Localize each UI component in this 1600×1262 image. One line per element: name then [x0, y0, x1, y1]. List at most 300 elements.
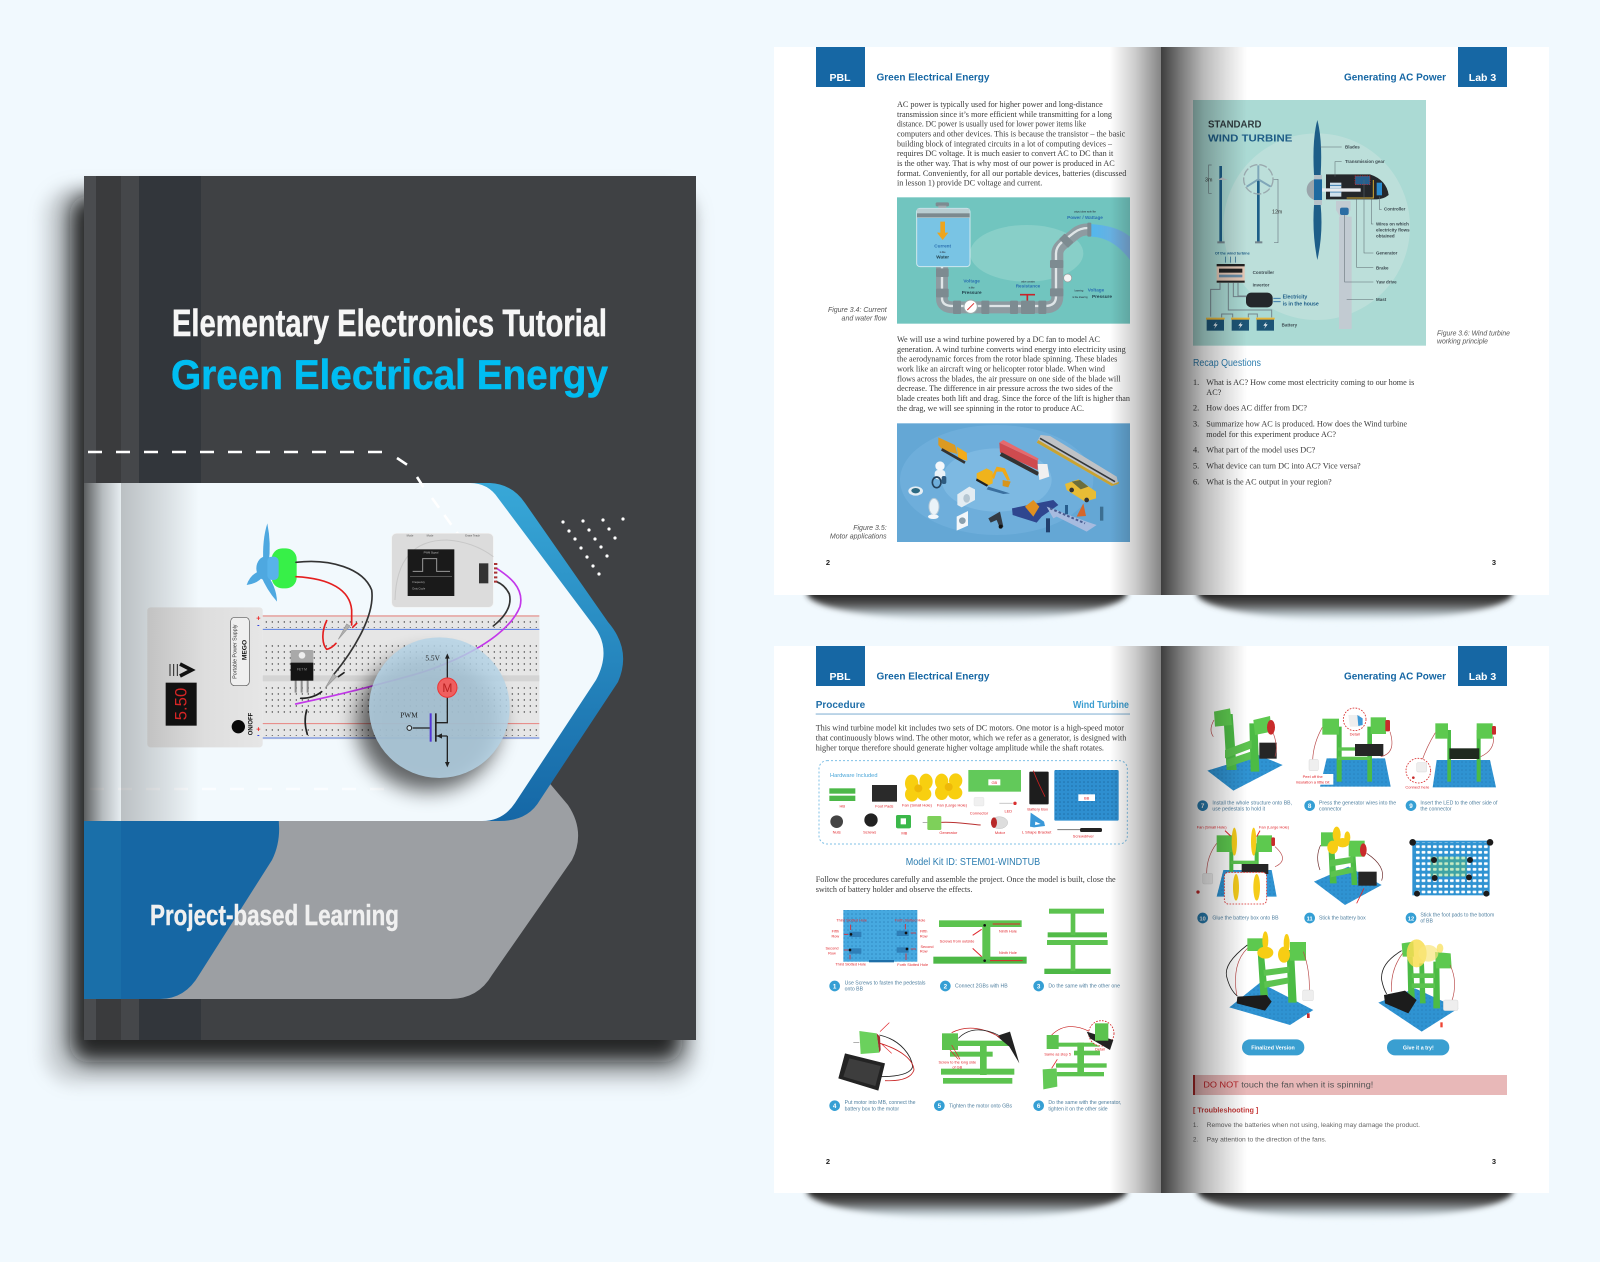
- figure 3.5: motor applications: [897, 423, 1130, 542]
- step 8: Press the generator wires into the: [1319, 800, 1396, 806]
- step 12: 12: [1408, 916, 1414, 922]
- troubleshooting list: Remove the batteries when not using, leaking may damage the product.: [1207, 1123, 1420, 1129]
- step 1: Second: [921, 945, 933, 949]
- oscilloscope: Mode: [407, 534, 414, 538]
- step 7: Install the whole structure onto BB,: [1212, 800, 1292, 806]
- disc device: [908, 486, 923, 496]
- figure 3.4: current and water flow: Power / Wattage: [1067, 215, 1103, 220]
- PBL tab: PBL: [830, 671, 851, 683]
- transistor: [291, 650, 313, 693]
- spine bands on the dark areas: [84, 176, 201, 1040]
- page number left: 2: [826, 1157, 830, 1166]
- power supply: +: [256, 614, 260, 623]
- recap questions list: 2.: [1193, 404, 1199, 413]
- power supply: Portable Power Supply: [233, 624, 239, 679]
- step 2: Ninth Hole: [999, 930, 1017, 934]
- left gutter shading: [1110, 646, 1161, 1193]
- small turbines: 12m: [1272, 209, 1283, 215]
- white dot pattern: [561, 517, 625, 576]
- step 5: of GB: [952, 1065, 963, 1069]
- BB board: [1054, 770, 1119, 821]
- step 6: tighten it on the other side: [1048, 1106, 1108, 1112]
- step 8: connector: [1319, 806, 1342, 812]
- magnifier circuit lens: M: [442, 681, 452, 695]
- body text: AC power: is the other way. That is why most of our power is produced in AC: [897, 159, 1115, 168]
- figure 3.4: current and water flow: lowering: [1075, 289, 1084, 292]
- recap questions list: [1193, 378, 1414, 487]
- step 10: 10: [1200, 916, 1206, 922]
- screwdriver: Screwdriver: [1073, 833, 1095, 838]
- step 9: 9: [1409, 803, 1413, 810]
- BB board: BB: [1084, 795, 1090, 800]
- page number left: 2: [826, 558, 830, 567]
- step 1: Forth Slotted Hole: [895, 918, 925, 922]
- figure 3.4: current and water flow: Resistance: [1016, 284, 1041, 289]
- step 1: onto BB: [845, 987, 864, 993]
- desk fan: [928, 498, 939, 519]
- step 5: Tighten the motor onto GBs: [949, 1103, 1013, 1109]
- motor: [991, 817, 1008, 835]
- body text: AC power: AC power is typically used for higher power and long-distance: [897, 100, 1103, 109]
- right gutter shading: [1161, 47, 1247, 595]
- wires: [296, 561, 521, 734]
- battery box: [1027, 771, 1049, 811]
- yaw drive: [1336, 201, 1351, 217]
- step 10: [1196, 825, 1290, 923]
- power supply: MEGO: [242, 640, 249, 660]
- figure 3.4: current and water flow: Pressure: [1092, 294, 1112, 299]
- foot pads: [872, 785, 897, 808]
- screwdriver: [1057, 828, 1102, 838]
- figure 3.4: current and water flow: Water: [936, 254, 949, 259]
- screws: [863, 813, 878, 835]
- right running head: Generating AC Power: [1344, 72, 1446, 84]
- figure 3.6: wind turbine: Yaw drive: [1376, 280, 1397, 285]
- bottom spread shadows: [807, 1164, 1513, 1218]
- figure 3.6: wind turbine: Controller: [1384, 207, 1406, 212]
- Lab 3 tab: Lab 3: [1469, 671, 1496, 683]
- body text: wind turbine: [897, 335, 1130, 413]
- body text: AC power: computers and other devices. This is because the transistor – the basic: [897, 130, 1126, 138]
- step 7: [1197, 708, 1292, 812]
- power supply: ON/OFF: [249, 712, 255, 735]
- step 1: Fifth: [832, 929, 839, 933]
- model kit ID: Model Kit ID: STEM01-WINDTUB: [906, 856, 1040, 868]
- step 6: Same as step 5: [1044, 1052, 1071, 1056]
- finalized version button: [1242, 1039, 1304, 1055]
- body text: wind turbine: blade creates both lift and drag. Since the force of the lift is higher than: [897, 394, 1130, 403]
- body text: wind turbine: flows across the blades, the air pressure on one side of the blade will: [897, 374, 1121, 383]
- follow paragraph: Follow the procedures carefully and assemble the project. Once the model is built, close the: [816, 875, 1116, 884]
- step 12: of BB: [1420, 919, 1434, 925]
- figure 3.6: wind turbine: Wires on which: [1376, 221, 1409, 226]
- finalized version button: Finalized Version: [1251, 1045, 1295, 1051]
- cover subtitle: Green Electrical Energy: [171, 351, 609, 398]
- dashed line: [88, 452, 458, 789]
- left page: [774, 47, 1161, 595]
- intro paragraph: This wind turbine model kit includes two sets of DC motors. One motor is a high-speed motor: [816, 724, 1124, 733]
- power supply: [147, 607, 263, 747]
- power supply: 5.50: [172, 688, 191, 720]
- figure 3.4: current and water flow: [897, 197, 1130, 324]
- controller, inverter and batteries: Invertor: [1253, 282, 1270, 287]
- troubleshooting list: 2.: [1193, 1138, 1198, 1144]
- step 4: Put motor into MB, connect the: [845, 1100, 916, 1106]
- GB board: [968, 770, 1021, 792]
- battery box: Battery Box: [1027, 806, 1048, 811]
- spine shading on the white panel: [84, 483, 199, 821]
- body text: wind turbine: the drag, we will see spinning in the rotor to produce AC.: [897, 404, 1084, 413]
- breadboard: [263, 615, 539, 739]
- step 9: Connect here: [1405, 785, 1430, 790]
- L bracket: L Shape Bracket: [1022, 829, 1052, 834]
- body text: AC power: transmission since it’s more efficient while transmitting for a long: [897, 110, 1112, 119]
- recap questions list: How does AC differ from DC?: [1206, 404, 1307, 413]
- caption: figure 3.5: Motor applications: [830, 533, 887, 540]
- caption: figure 3.6: [1437, 330, 1510, 346]
- body text: AC power: distance. DC power is usually used for lower power items like: [897, 120, 1086, 129]
- step 3: [1033, 909, 1120, 991]
- page number right: 3: [1492, 1157, 1496, 1166]
- GB board: GB: [991, 780, 998, 785]
- magnifier circuit lens: 5.5V: [425, 653, 441, 662]
- figure 3.4: current and water flow: valve creates: [1021, 280, 1036, 283]
- MB: MB: [901, 830, 908, 835]
- foot pads: Foot Pads: [875, 803, 893, 808]
- motor: Motor: [995, 830, 1006, 835]
- cover title: Elementary Electronics Tutorial: [172, 303, 607, 345]
- blades: [1313, 120, 1321, 260]
- PBL tab: PBL: [830, 72, 851, 84]
- figure 3.6: wind turbine: Generator: [1376, 251, 1398, 256]
- step 1: Row: [831, 934, 839, 938]
- figure 3.6: wind turbine: Blades: [1345, 145, 1360, 150]
- oscilloscope: Duty Cycle: [412, 586, 426, 590]
- step 12: Stick the foot pads to the bottom: [1420, 913, 1494, 919]
- LED: [999, 802, 1017, 813]
- connector: Connector: [970, 810, 989, 815]
- body text: wind turbine: the aerodynamic forces from the rotor blade spinning. These blades: [897, 355, 1117, 364]
- body text: AC power: in lesson 1) provide DC voltage and current.: [897, 179, 1042, 188]
- intro paragraph: [816, 724, 1126, 752]
- step 6: Detail: [1095, 1047, 1105, 1051]
- top spread shadows: [807, 566, 1513, 620]
- step 2: Screws from outside: [940, 939, 974, 943]
- leader lines: [1320, 147, 1382, 299]
- wall vent: [957, 511, 968, 531]
- cover label: Project-based Learning: [150, 900, 399, 932]
- recap questions list: What part of the model uses DC?: [1206, 446, 1316, 455]
- troubleshooting heading: [ Troubleshooting ]: [1193, 1108, 1258, 1115]
- magnifier circuit lens: [369, 637, 510, 778]
- step 8: insulation a little bit: [1296, 780, 1330, 785]
- caption: figure 3.5: Figure 3.5:: [853, 525, 887, 532]
- step 5: 5: [938, 1103, 942, 1110]
- recap questions list: model for this experiment produce AC?: [1206, 430, 1336, 439]
- procedure heading: Procedure: [816, 699, 865, 711]
- figure 3.6: wind turbine: [1193, 100, 1426, 346]
- LED: LED: [1004, 808, 1012, 813]
- step 2: 2: [944, 983, 948, 990]
- give it a try button: [1387, 1039, 1449, 1055]
- controller, inverter and batteries: Controller: [1253, 270, 1274, 275]
- body text: AC power: building block of integrated circuits in a lot of computing devices –: [897, 139, 1113, 148]
- assembly steps 7-12: [1196, 708, 1498, 925]
- step 1: Row: [828, 951, 836, 955]
- recap questions list: 4.: [1193, 446, 1199, 455]
- step 7: use pedestals to hold it: [1212, 806, 1266, 812]
- try it model: [1378, 939, 1458, 1032]
- step 8: 8: [1308, 803, 1312, 810]
- figure 3.4: current and water flow: is like lowering: [1072, 296, 1088, 299]
- top spread: [774, 47, 1549, 595]
- intro paragraph: that continuously blows wind. The other motor, which we refer as a generator, is designed with: [816, 734, 1126, 743]
- step 7: 7: [1201, 803, 1205, 810]
- nuts: [830, 815, 843, 835]
- step 5: Screw to the long side: [938, 1061, 976, 1065]
- recap questions list: Summarize how AC is produced. How does the Wind turbine: [1206, 420, 1407, 429]
- figure 3.4: current and water flow: Pressure: [962, 290, 982, 295]
- factory line: [1012, 500, 1103, 532]
- step 1: [826, 910, 933, 993]
- give it a try button: Give it a try!: [1403, 1045, 1434, 1051]
- oscilloscope: [392, 533, 497, 607]
- warning banner: DO NOT touch the fan when it is spinning!: [1203, 1080, 1373, 1090]
- procedure heading: [816, 699, 1130, 715]
- oscilloscope: Erase Teach: [465, 534, 481, 538]
- connector: [970, 797, 989, 815]
- step 4: 4: [833, 1103, 837, 1110]
- finalized models and notes: [1193, 931, 1507, 1144]
- book cover: [84, 176, 696, 1040]
- gray bottom shape: [84, 760, 578, 999]
- step 11: 11: [1307, 916, 1313, 922]
- book cover drop shadow: [44, 186, 698, 1084]
- recap questions list: 6.: [1193, 478, 1199, 487]
- fan small: Fan (Small Hole): [902, 803, 933, 808]
- left gutter shading: [1110, 47, 1161, 595]
- follow paragraph: [816, 875, 1116, 894]
- air conditioner: [957, 487, 975, 507]
- figure 3.6: wind turbine: electricity flows: [1376, 227, 1410, 232]
- left running head: Green Electrical Energy: [876, 672, 990, 682]
- follow paragraph: switch of battery holder and observe the effects.: [816, 885, 972, 894]
- hardware kit: Hardware Included: [830, 773, 877, 779]
- Lab 3 tab: Lab 3: [1469, 72, 1496, 84]
- troubleshooting list: [1193, 1123, 1420, 1144]
- figure 3.4: current and water flow: output does work like: [1074, 211, 1097, 214]
- fan large: Fan (Large Hole): [937, 803, 968, 808]
- scooter: [988, 512, 1003, 529]
- step 9: [1405, 723, 1498, 812]
- recap questions list: 3.: [1193, 420, 1199, 429]
- oscilloscope: Frequency: [412, 580, 426, 584]
- fan large: [935, 773, 968, 808]
- figure 3.6: wind turbine: Brake: [1376, 265, 1389, 270]
- fan small: [902, 774, 933, 808]
- step 1: Fifth: [920, 929, 927, 933]
- page number right: 3: [1492, 558, 1496, 567]
- generator: Generator: [939, 830, 958, 835]
- HB bars: [829, 788, 855, 808]
- recap questions heading: Recap Questions: [1193, 358, 1261, 369]
- screws: Screws: [863, 830, 876, 835]
- step 4: battery box to the motor: [845, 1106, 899, 1112]
- step 11: Stick the battery box: [1319, 915, 1366, 921]
- caption: figure 3.4: and water flow: [842, 315, 888, 322]
- body text: AC power: [897, 100, 1126, 188]
- figure 3.6: wind turbine: STANDARD: [1208, 120, 1261, 131]
- step 2: Connect 2GBs with HB: [955, 983, 1008, 989]
- figure 3.4: current and water flow: Voltage: [1088, 287, 1105, 292]
- step 2: Ninth Hole: [999, 951, 1017, 955]
- step 1: Forth Slotted Hole: [897, 963, 928, 967]
- panel blue edge: [84, 483, 623, 821]
- right gutter shading: [1161, 646, 1247, 1193]
- controller, inverter and batteries: is in the house: [1283, 302, 1319, 308]
- step 6: 6: [1037, 1103, 1041, 1110]
- PBL tab: [816, 47, 865, 87]
- circuit illustration: [147, 523, 539, 791]
- step 1: Row: [920, 950, 928, 954]
- container truck: [999, 440, 1049, 480]
- step 10: Glue the battery box onto BB: [1212, 915, 1279, 921]
- step 11: [1304, 827, 1383, 923]
- power supply: -: [257, 620, 260, 629]
- step 4: [829, 1023, 916, 1112]
- excavator: [976, 467, 1011, 494]
- PBL tab: [816, 646, 865, 686]
- caption: figure 3.4: Figure 3.4: Current: [828, 307, 888, 314]
- caption: figure 3.6: Figure 3.6: Wind turbine: [1437, 330, 1510, 337]
- Lab 3 tab: [1458, 47, 1507, 87]
- step 3: 3: [1037, 983, 1041, 990]
- step 1: 1: [833, 983, 837, 990]
- nuts: Nuts: [833, 830, 841, 835]
- recap questions list: What device can turn DC into AC? Vice versa?: [1206, 462, 1361, 471]
- caption: figure 3.5: [830, 525, 887, 540]
- figure 3.4: current and water flow: is like: [940, 252, 946, 254]
- high-speed train: [1037, 435, 1119, 486]
- generator: [923, 816, 981, 835]
- L bracket: [1022, 813, 1052, 834]
- step 1: Use Screws to fasten the pedestals: [845, 980, 926, 986]
- recap questions list: AC?: [1206, 388, 1222, 397]
- right page: [1161, 646, 1549, 1193]
- body text: AC power: requires DC voltage. It is much easier to convert AC to DC than it: [897, 149, 1114, 158]
- controller, inverter and batteries: Battery: [1282, 323, 1298, 328]
- right running head: Generating AC Power: [1344, 672, 1446, 682]
- small turbines: [1205, 165, 1283, 243]
- step 1: Third Slotted Hole: [836, 919, 867, 923]
- bottom spread: [774, 646, 1549, 1193]
- power supply: +: [256, 724, 260, 733]
- step 8: Detail: [1350, 731, 1360, 736]
- step 10: Fan (Large Hole): [1259, 825, 1290, 830]
- step 8: Peel off the: [1303, 774, 1323, 779]
- finalized version model: [1226, 931, 1313, 1025]
- controller, inverter and batteries: [1206, 252, 1319, 331]
- mixer truck: [938, 437, 967, 463]
- fan and motor: [247, 523, 297, 602]
- step 1: Second: [826, 947, 838, 951]
- step 5: [934, 1028, 1019, 1111]
- figure 3.6: wind turbine: obtained: [1376, 233, 1395, 238]
- step 6: Do the same with the generator,: [1048, 1100, 1121, 1106]
- recap questions list: 5.: [1193, 462, 1199, 471]
- troubleshooting list: 1.: [1193, 1123, 1198, 1129]
- step 2: [933, 920, 1027, 991]
- step 3: Do the same with the other one: [1048, 983, 1120, 989]
- magnifier lens shadow: [357, 654, 500, 791]
- HB bars: HB: [840, 803, 845, 808]
- blue corner shape: [84, 815, 279, 999]
- body text: wind turbine: decrease. The difference in air pressure across the two sides of the: [897, 384, 1113, 393]
- body text: AC power: format. Conveniently, for all our portable devices, batteries (discussed: [897, 169, 1126, 178]
- recap questions list: What is AC? How come most electricity coming to our home is: [1206, 378, 1414, 387]
- MB: [896, 815, 911, 835]
- caption: figure 3.6: working principle: [1437, 338, 1488, 346]
- mast: [1339, 217, 1352, 329]
- oscilloscope: PWM Signal: [424, 551, 439, 555]
- body text: wind turbine: work like an aircraft wing or helicopter rotor blade. When wind: [897, 364, 1105, 374]
- cover base: [84, 176, 696, 1040]
- assembly steps 1-6: [826, 909, 1121, 1112]
- body text: wind turbine: We will use a wind turbine powered by a DC fan to model AC: [897, 335, 1101, 344]
- figure 3.4: current and water flow: is like: [969, 288, 975, 290]
- right page: [1161, 47, 1549, 595]
- magnifier circuit lens: PWM: [400, 710, 418, 719]
- left running head: Green Electrical Energy: [876, 72, 990, 84]
- recap questions list: What is the AC output in your region?: [1206, 478, 1332, 487]
- troubleshooting list: Pay attention to the direction of the fans.: [1207, 1138, 1327, 1144]
- step 10: Fan (Small Hole): [1197, 825, 1227, 830]
- small turbines: 3m: [1205, 177, 1213, 183]
- hub: [1314, 175, 1322, 205]
- step 1: Row: [920, 934, 928, 938]
- figure 3.6: wind turbine: WIND TURBINE: [1208, 133, 1292, 144]
- figure 3.6: wind turbine: Mast: [1376, 297, 1387, 302]
- oscilloscope: Mode: [427, 534, 434, 538]
- step 8: [1293, 708, 1396, 812]
- procedure heading: Wind Turbine: [1073, 699, 1129, 711]
- body text: wind turbine: generation. A wind turbine converts wind energy into electricity using: [897, 345, 1126, 354]
- caption: figure 3.4: [828, 307, 888, 322]
- warning banner: [1193, 1075, 1507, 1095]
- power supply: -: [257, 730, 260, 739]
- intro paragraph: higher torque therefore should generate higher voltage amplitude while the shaft rotates.: [816, 743, 1104, 752]
- step 1: Third Slotted Hole: [835, 962, 866, 966]
- transistor: FET M: [297, 667, 307, 671]
- left page: [774, 646, 1161, 1193]
- step 9: the connector: [1420, 806, 1452, 812]
- hardware kit: [819, 761, 1127, 844]
- recap questions list: 1.: [1193, 378, 1199, 387]
- white illustration panel: [84, 483, 604, 821]
- controller, inverter and batteries: Electricity: [1283, 295, 1307, 301]
- nacelle: [1326, 174, 1389, 199]
- controller, inverter and batteries: Of the wind turbine: [1215, 252, 1250, 256]
- figure 3.4: current and water flow: Current: [934, 243, 952, 248]
- Lab 3 tab: [1458, 646, 1507, 686]
- figure 3.6: wind turbine: Transmission gear: [1345, 159, 1385, 164]
- figure 3.4: current and water flow: Voltage: [963, 279, 980, 284]
- sports car: [1065, 479, 1096, 502]
- step 9: Insert the LED to the other side of: [1420, 800, 1498, 806]
- step 12: [1406, 839, 1494, 925]
- robot: [932, 461, 946, 488]
- step 6: [1033, 1021, 1121, 1112]
